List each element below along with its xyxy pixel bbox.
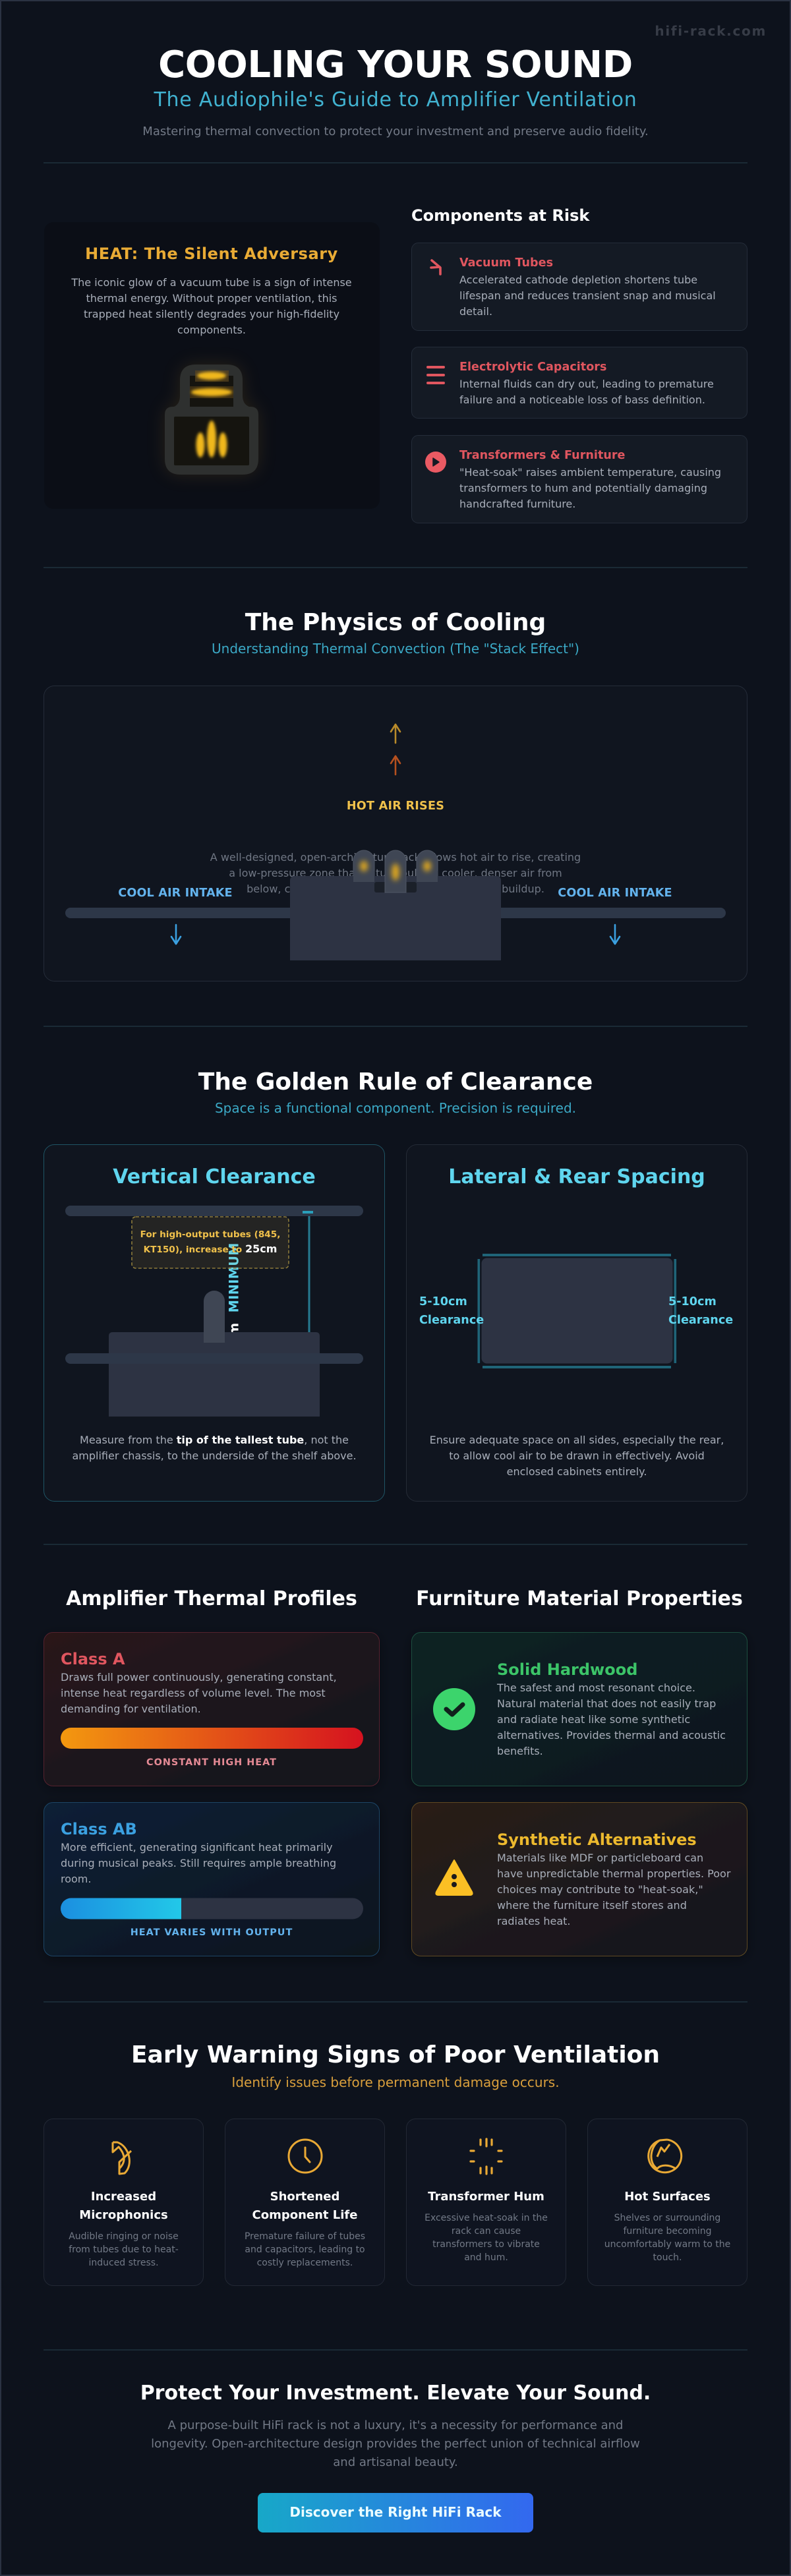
text: component life: and capacitors, leading to: [245, 2244, 365, 2255]
amplifier top view: [481, 1258, 672, 1363]
text: class a: demanding for ventilation.: [61, 1703, 201, 1715]
callout: high-output tubes: KT150), increase to 25cm: [144, 1243, 277, 1255]
top shelf: [65, 1206, 363, 1216]
text: solid hardwood: and radiate heat like some synthetic: [497, 1713, 690, 1726]
caption: lateral: to allow cool air to be drawn in effectively. Avoid: [449, 1449, 705, 1462]
text: vacuum tubes: detail.: [459, 305, 492, 318]
label: left clearance: 5-10cm: [419, 1295, 467, 1308]
tube: [204, 1291, 225, 1343]
text: class ab: during musical peaks. Still requires ample breathing: [61, 1857, 336, 1869]
heading: amplifier thermal profiles: Amplifier Thermal Profiles: [66, 1587, 357, 1610]
label: right clearance: Clearance: [668, 1314, 733, 1327]
text: hot surfaces: furniture becoming: [624, 2226, 712, 2237]
lower shelf: [65, 1353, 363, 1364]
text: physics explanation: below, continuously preventing dangerous heat buildup.: [247, 883, 544, 895]
title: transformer hum: Transformer Hum: [428, 2190, 544, 2204]
amplifier chassis: [109, 1332, 320, 1417]
text: vacuum tubes: Accelerated cathode depletion shortens tube: [459, 274, 697, 286]
subtitle: The Audiophile's Guide to Amplifier Ventilation: [154, 88, 637, 111]
icon: play circle: [425, 452, 446, 473]
title: microphonics: Microphonics: [79, 2208, 168, 2222]
text: hot surfaces: uncomfortably warm to the: [604, 2239, 730, 2250]
card: transformer hum: [406, 2119, 566, 2286]
subheading: golden rule: Space is a functional component. Precision is required.: [215, 1100, 576, 1116]
arrow: hot air upper: [391, 724, 400, 743]
text: class ab: room.: [61, 1873, 91, 1885]
text: transformers: handcrafted furniture.: [459, 498, 575, 510]
shelf: [65, 908, 726, 918]
arrow: cool air right: [610, 925, 620, 944]
panel: vertical clearance: [44, 1144, 385, 1502]
title: component life: Shortened: [270, 2190, 339, 2204]
header: [142, 44, 649, 138]
card: class ab: [44, 1802, 380, 1956]
card: vacuum tubes: [411, 243, 747, 331]
label: hot air rises: HOT AIR RISES: [347, 800, 444, 813]
title: class ab: Class AB: [61, 1820, 137, 1838]
caption: lateral: enclosed cabinets entirely.: [507, 1465, 647, 1478]
icon: hum: [471, 2139, 502, 2174]
icon: glowing vacuum tube: [165, 365, 258, 475]
title: solid hardwood: Solid Hardwood: [497, 1660, 637, 1679]
icon: clock: [289, 2140, 322, 2173]
watermark: hifi-rack.com: [655, 23, 767, 39]
panel: lateral and rear spacing: [406, 1144, 747, 1502]
callout: high-output tubes: [132, 1217, 289, 1268]
label: right clearance: 5-10cm: [668, 1295, 717, 1308]
arrow: hot air lower: [391, 756, 400, 775]
subheading: early warning: Identify issues before permanent damage occurs.: [231, 2074, 560, 2090]
text: solid hardwood: Natural material that does not easily trap: [497, 1697, 716, 1710]
callout: high-output tubes: For high-output tubes (845,: [140, 1229, 280, 1240]
clearance lines: [477, 1254, 676, 1368]
card: hot surfaces: [588, 2119, 747, 2286]
text: microphonics: Audible ringing or noise: [69, 2231, 179, 2242]
text: call to action: A purpose-built HiFi rack is not a luxury, it's a necessity for performance and: [168, 2418, 623, 2432]
card: class a: [44, 1632, 380, 1786]
text: electrolytic capacitors: Internal fluids can dry out, leading to premature: [459, 378, 714, 390]
caption: vertical: amplifier chassis, to the underside of the shelf above.: [72, 1449, 357, 1462]
title: vacuum tubes: Vacuum Tubes: [459, 256, 553, 270]
text: synthetic alternatives: have unpredictable thermal properties. Poor: [497, 1867, 731, 1880]
heading: call to action: Protect Your Investment. Elevate Your Sound.: [140, 2382, 651, 2405]
text: solid hardwood: benefits.: [497, 1745, 543, 1757]
text: class a: intense heat regardless of volume level. The most: [61, 1687, 326, 1699]
text: solid hardwood: The safest and most resonant choice.: [496, 1682, 695, 1694]
text: transformer hum: transformers to vibrate: [432, 2239, 540, 2250]
label: cool air intake left: COOL AIR INTAKE: [118, 887, 233, 900]
text: transformer hum: rack can cause: [452, 2226, 521, 2237]
text: component life: costly replacements.: [257, 2258, 353, 2268]
card: shortened component life: [225, 2119, 385, 2286]
icon: arrow: [431, 260, 440, 274]
button: discover: [258, 2493, 533, 2532]
label: constant high heat: CONSTANT HIGH HEAT: [146, 1757, 277, 1768]
text: hot surfaces: Shelves or surrounding: [614, 2213, 720, 2223]
card: transformers and furniture: [411, 435, 747, 523]
text: transformers: "Heat-soak" raises ambient temperature, causing: [459, 466, 721, 479]
text: microphonics: from tubes due to heat-: [69, 2244, 179, 2255]
amplifier with tubes: [290, 850, 501, 960]
text: call to action: longevity. Open-architecture design provides the perfect union of technical airflow: [151, 2437, 640, 2451]
icon: check circle: [433, 1688, 475, 1730]
title: COOLING YOUR SOUND: [158, 44, 633, 86]
text: synthetic alternatives: where the furniture itself stores and: [497, 1899, 687, 1912]
text: physics explanation: a low-pressure zone that in turn pulls in cooler, denser air from: [229, 867, 562, 879]
label: heat varies: HEAT VARIES WITH OUTPUT: [131, 1927, 293, 1938]
icon: warning triangle: [436, 1860, 473, 1895]
title: electrolytic capacitors: Electrolytic Capacitors: [459, 361, 606, 374]
caption: vertical: Measure from the tip of the tallest tube, not the: [80, 1434, 349, 1446]
subheading: physics: Understanding Thermal Convection (The "Stack Effect"): [212, 641, 579, 657]
text: transformer hum: and hum.: [464, 2252, 508, 2263]
text: class ab: More efficient, generating significant heat primarily: [61, 1841, 333, 1854]
panel: heat the silent adversary: [44, 222, 380, 509]
text: call to action: and artisanal beauty.: [333, 2455, 458, 2469]
card: electrolytic capacitors: [411, 347, 747, 418]
title: class a: Class A: [61, 1650, 125, 1668]
heading: vertical clearance: Vertical Clearance: [113, 1165, 316, 1188]
heading: components at risk: Components at Risk: [411, 206, 590, 225]
panel: stack effect diagram: [44, 686, 747, 981]
arrow: cool air left: [171, 925, 181, 944]
text: electrolytic capacitors: failure and a noticeable loss of bass definition.: [459, 394, 705, 406]
heading: lateral: Lateral & Rear Spacing: [448, 1165, 705, 1188]
card: solid hardwood: [411, 1632, 747, 1786]
measurement line: [308, 1216, 310, 1332]
icon: hot surface: [649, 2140, 682, 2173]
text: class a: Draws full power continuously, generating constant,: [61, 1671, 337, 1683]
text: transformers: transformers to hum and potentially damaging: [459, 482, 707, 494]
text: synthetic alternatives: choices may contribute to "heat-soak,": [497, 1883, 703, 1896]
heat bar: varies: [61, 1898, 363, 1919]
text: heat description: trapped heat silently degrades your high-fidelity: [84, 308, 339, 320]
title: transformers: Transformers & Furniture: [459, 449, 626, 462]
card: increased microphonics: [44, 2119, 203, 2286]
text: component life: Premature failure of tubes: [245, 2231, 365, 2242]
text: hot surfaces: touch.: [653, 2252, 682, 2263]
heading: furniture material properties: Furniture Material Properties: [416, 1587, 743, 1610]
title: synthetic alternatives: Synthetic Alternatives: [497, 1830, 697, 1849]
heading: heat: HEAT: The Silent Adversary: [85, 245, 338, 263]
text: physics explanation: A well-designed, open-architecture rack allows hot air to rise, creating: [210, 851, 581, 864]
text: heat description: thermal energy. Without proper ventilation, this: [86, 292, 337, 305]
icon: bars: [428, 367, 444, 383]
title: component life: Component Life: [252, 2208, 357, 2222]
title: microphonics: Increased: [91, 2190, 156, 2204]
button: discover: Discover the Right HiFi Rack: [289, 2504, 502, 2520]
heading: early warning signs: Early Warning Signs of Poor Ventilation: [131, 2041, 660, 2068]
label: 15cm minimum: 15cm MINIMUM: [227, 1243, 241, 1361]
text: microphonics: induced stress.: [88, 2258, 159, 2268]
icon: ear: [113, 2142, 131, 2174]
text: vacuum tubes: lifespan and reduces transient snap and musical: [459, 289, 716, 302]
label: left clearance: Clearance: [419, 1314, 484, 1327]
card: synthetic alternatives: [411, 1802, 747, 1956]
tagline: Mastering thermal convection to protect your investment and preserve audio fidelity.: [142, 125, 649, 138]
heat bar: constant: [61, 1728, 363, 1749]
text: heat description: components.: [177, 324, 246, 336]
heading: physics of cooling: The Physics of Cooling: [245, 609, 546, 636]
text: synthetic alternatives: radiates heat.: [497, 1915, 570, 1927]
caption: lateral: Ensure adequate space on all sides, especially the rear,: [430, 1434, 724, 1446]
heading: golden rule: The Golden Rule of Clearance: [198, 1068, 593, 1096]
text: synthetic alternatives: Materials like MDF or particleboard can: [497, 1852, 703, 1864]
title: hot surfaces: Hot Surfaces: [624, 2190, 711, 2204]
label: cool air intake right: COOL AIR INTAKE: [558, 887, 672, 900]
text: solid hardwood: alternatives. Provides thermal and acoustic: [497, 1729, 726, 1742]
text: transformer hum: Excessive heat-soak in the: [425, 2213, 548, 2223]
text: heat description: The iconic glow of a vacuum tube is a sign of intense: [71, 276, 352, 289]
